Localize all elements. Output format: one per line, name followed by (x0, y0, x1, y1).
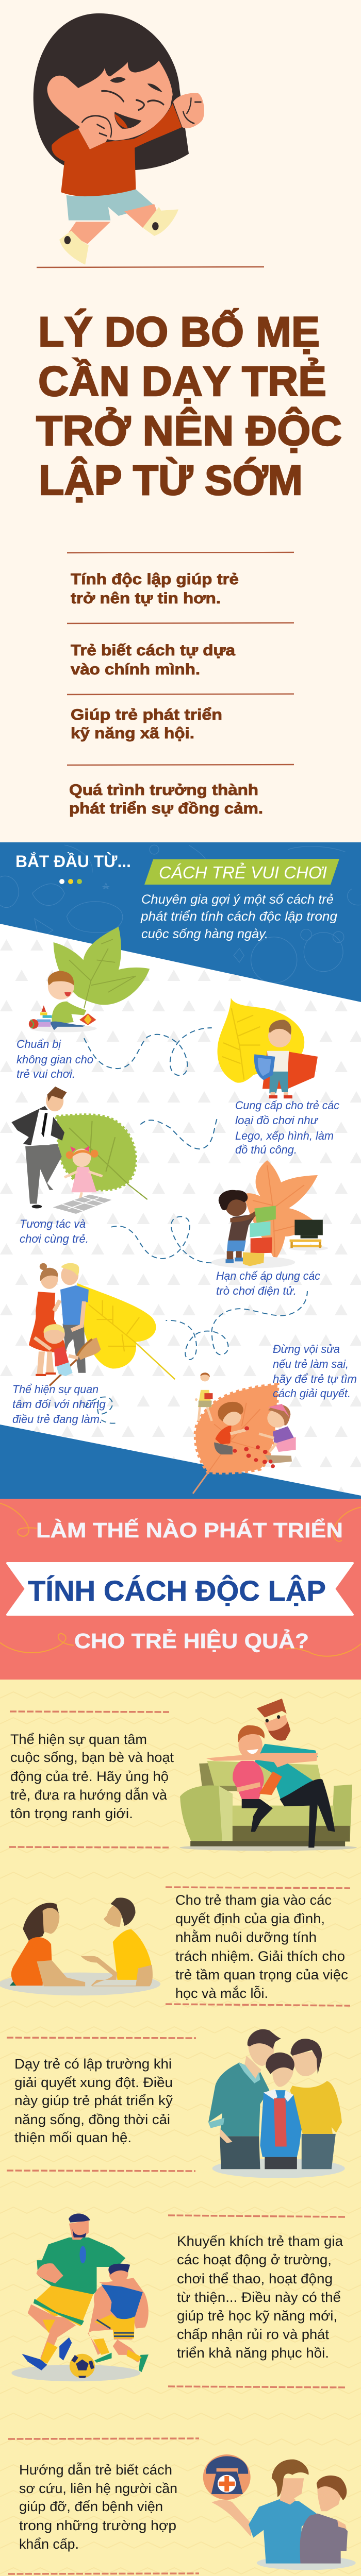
text block: reason list: Giúp trẻ phát triển (71, 706, 222, 723)
panel background: triangle pattern (0, 924, 361, 1496)
text block: expert intro (140, 892, 337, 941)
text block: step 5: Thể hiện sự quan (12, 1383, 99, 1396)
tip 3 text (14, 2056, 173, 2145)
tip 3 text: giải quyết xung đột. Điều (14, 2075, 173, 2090)
text block: step 1: Chuẩn bị (17, 1038, 61, 1050)
tip 3 text: năng sống, đồng thời cải (14, 2112, 170, 2127)
tip 4 text (177, 2233, 343, 2361)
text block: reason list: trở nên tự tin hơn. (71, 590, 221, 607)
tip 4 text: giúp trẻ học kỹ năng mới, (177, 2308, 337, 2324)
text block: step 6: nếu trẻ làm sai, (273, 1358, 349, 1370)
illustration: family of three (208, 2029, 345, 2178)
text block: step 4: trò chơi điện tử. (216, 1284, 297, 1297)
text block: reason list: kỹ năng xã hội. (71, 725, 194, 742)
tip 1 text: cuộc sống, bạn bè và hoạt (10, 1750, 174, 1765)
title (36, 309, 342, 504)
tip 5 text: trong những trường hợp (19, 2518, 176, 2533)
text block: reason list: vào chính mình. (71, 661, 200, 678)
heading ribbon: independent character: TÍNH CÁCH ĐỘC LẬP (28, 1574, 326, 1607)
text block: reason list: Quá trình trưởng thành (69, 782, 258, 799)
illustration: man holding emergency phone with boy (203, 2454, 356, 2570)
text block: reason list (69, 571, 263, 817)
text block: step 4 (216, 1269, 320, 1297)
illustration: father and girl on green leaf (11, 1087, 147, 1208)
tip 5 text: khẩn cấp. (19, 2536, 79, 2552)
tip 2 text: trẻ tầm quan trọng của việc (175, 1967, 348, 1982)
illustration: hopscotch grid (53, 1195, 112, 1214)
heading: how to develop: LÀM THẾ NÀO PHÁT TRIỂN (36, 1518, 343, 1542)
text block: step 3: chơi cùng trẻ. (20, 1232, 89, 1245)
text block: expert intro: cuộc sống hàng ngày. (141, 927, 268, 941)
illustration: boy with toys on green leaf (29, 927, 150, 1032)
tip 1 text (10, 1732, 174, 1821)
text block: step 1: trẻ vui chơi. (17, 1067, 75, 1080)
illustration: mother and father talking (0, 1897, 160, 1995)
text block: expert intro: phát triển tính cách độc lập trong (140, 909, 337, 924)
tip 2 text: quyết định của gia đình, (175, 1911, 325, 1926)
tip 2 text: trách nhiệm. Giải thích cho (175, 1948, 345, 1964)
tip 4 text: triển khả năng phục hồi. (177, 2345, 329, 2361)
tip 2 text (175, 1892, 348, 2001)
heading ribbon: independent character (7, 1563, 353, 1615)
text block: step 2: Cung cấp cho trẻ các (235, 1099, 339, 1112)
illustration: children with apples on orange leaf (193, 1372, 296, 1494)
text block: reason list: Trẻ biết cách tự dựa (71, 642, 235, 659)
text block: step 2: Lego, xếp hình, làm (235, 1129, 334, 1142)
arrow: dashed path 1 (84, 1028, 307, 1423)
tip 4 text: Khuyến khích trẻ tham gia (177, 2233, 343, 2249)
heading: start from (15, 852, 131, 884)
text block: step 2 (235, 1099, 339, 1156)
text block: step 6: hãy để trẻ tự tìm (273, 1372, 357, 1385)
illustration: father and son on sofa (179, 1699, 357, 1851)
tip 3 text: này giúp trẻ phát triển kỹ (14, 2093, 173, 2108)
tip 2 text: Cho trẻ tham gia vào các (175, 1892, 332, 1908)
title: LÝ DO BỐ MẸ (38, 309, 320, 355)
tip 2 text: nhằm nuôi dưỡng tính (175, 1929, 317, 1945)
tip 5 text: Hướng dẫn trẻ biết cách (19, 2462, 172, 2478)
illustration: father and son playing football (11, 2214, 149, 2381)
tip 4 text: từ thiện... Điều này có thể (177, 2290, 341, 2305)
text block: step 1 (17, 1038, 93, 1080)
text block: step 3: Tương tác và (20, 1217, 86, 1230)
tip 2 text: học và mắc lỗi. (175, 1985, 268, 2001)
text block: step 4: Hạn chế áp dụng các (216, 1269, 320, 1282)
tip 4 text: chấp nhận rủi ro và phát (177, 2327, 330, 2342)
text block: step 6: cách giải quyết. (273, 1387, 351, 1400)
illustration: boy with blocks on orange leaf (211, 1160, 328, 1268)
text block: step 1: không gian cho (17, 1053, 93, 1066)
text block: step 6: Đừng vội sửa (273, 1343, 340, 1355)
tip 5 text: sơ cứu, liên hệ người cần (19, 2481, 177, 2496)
heading banner: how children play (144, 859, 339, 885)
tip 3 text: Dạy trẻ có lập trường khi (14, 2056, 172, 2072)
text block: step 3 (20, 1217, 89, 1245)
text block: step 5: điều trẻ đang làm. (12, 1413, 103, 1426)
title: TRỞ NÊN ĐỘC (36, 407, 342, 454)
tip 1 text: tôn trọng ranh giới. (10, 1806, 133, 1821)
text block: step 5: tâm đối với những (12, 1398, 106, 1411)
text block: step 2: loại đồ chơi như (235, 1114, 319, 1127)
text block: step 5 (12, 1383, 106, 1426)
text block: reason list: phát triển sự đồng cảm. (69, 800, 263, 817)
tip 5 text: giúp đỡ, đến bệnh viện (19, 2499, 163, 2514)
tip 4 text: chơi thể thao, hoạt động (177, 2271, 333, 2286)
text block: step 2: đồ thủ công. (235, 1143, 297, 1156)
heading banner: how children play: CÁCH TRẺ VUI CHƠI (159, 862, 327, 882)
illustration: family on yellow leaf (29, 1263, 175, 1386)
text block: expert intro: Chuyên gia gợi ý một số cách trẻ (141, 892, 334, 907)
panel: intro (34, 13, 342, 817)
heading: start from: BẮT ĐẦU TỪ... (15, 852, 131, 871)
illustration: laughing girl (34, 13, 204, 265)
text block: reason list: Tính độc lập giúp trẻ (71, 571, 239, 588)
heading: for children effectively: CHO TRẺ HIỆU QUẢ? (74, 1629, 309, 1653)
tip 5 text (19, 2462, 177, 2552)
panel: how children play (0, 842, 361, 1499)
tip 4 text: các hoạt động ở trường, (177, 2252, 332, 2267)
tip 1 text: động của trẻ. Hãy ủng hộ (10, 1769, 169, 1784)
illustration: superhero boy on yellow leaf (218, 998, 318, 1098)
panel: section header (0, 1499, 361, 1680)
title: LẬP TỪ SỚM (39, 457, 303, 504)
tip 1 text: trẻ, đưa ra hướng dẫn và (10, 1787, 168, 1803)
text block: step 6 (273, 1343, 357, 1400)
tip 3 text: thiện mối quan hệ. (14, 2130, 132, 2145)
title: CẦN DẠY TRẺ (38, 358, 326, 405)
tip 1 text: Thể hiện sự quan tâm (10, 1732, 147, 1747)
panel: development tips (0, 1680, 361, 2576)
